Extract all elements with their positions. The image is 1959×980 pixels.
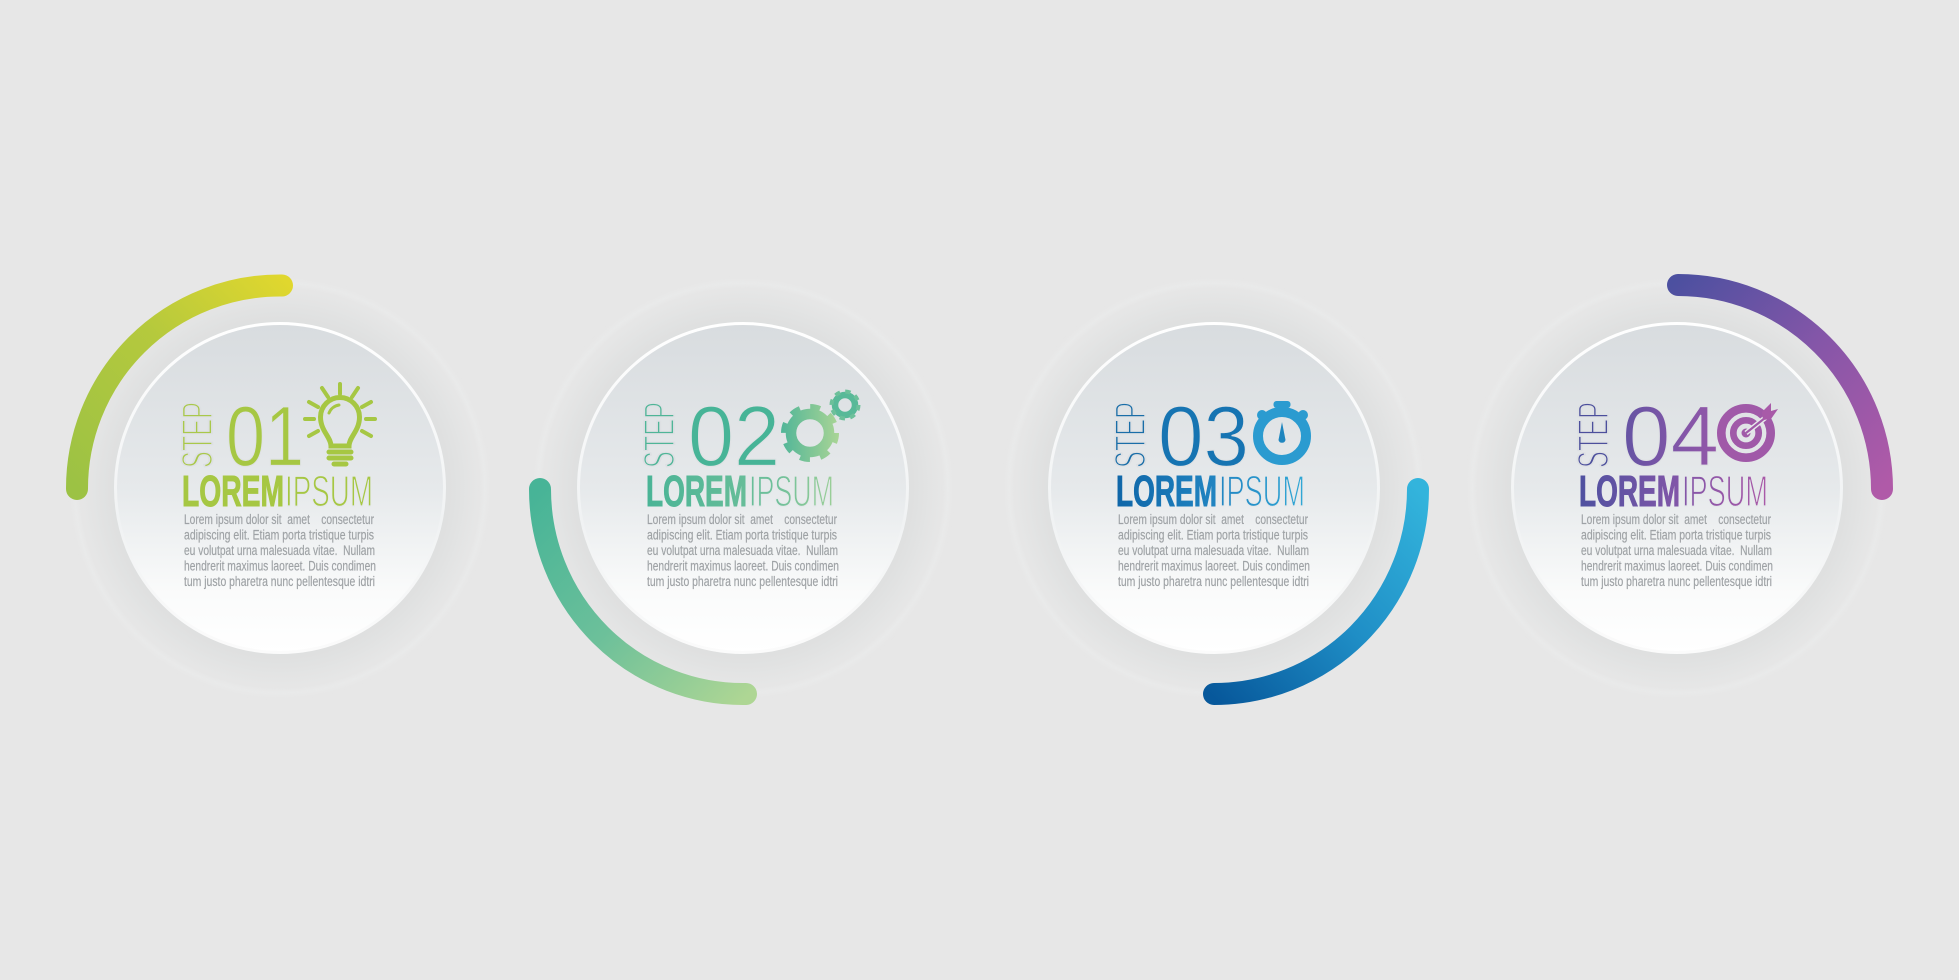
panel: step 1: [65, 273, 495, 703]
body text: tum justo pharetra nunc pellentesque idtri: [1581, 574, 1772, 589]
arc step 4: [1678, 285, 1882, 489]
backing rings step 2: [528, 273, 958, 703]
backing rings step 1: [65, 273, 495, 703]
icon: gears: [784, 392, 858, 458]
body text: Lorem ipsum dolor sit amet consectetur: [184, 512, 374, 527]
panel: step 4: [1462, 273, 1892, 703]
heading: IPSUM: [749, 468, 834, 516]
icon: stopwatch: [1257, 401, 1308, 460]
body text: Lorem ipsum dolor sit amet consectetur: [1118, 512, 1308, 527]
body text: [1118, 512, 1310, 589]
label: STEP: STEP: [636, 402, 684, 468]
heading: IPSUM: [1219, 468, 1305, 516]
number 01: 01: [226, 390, 304, 484]
label: STEP: STEP: [1570, 402, 1618, 468]
body text: tum justo pharetra nunc pellentesque idtri: [647, 574, 838, 589]
body text: eu volutpat urna malesuada vitae. Nullam: [184, 543, 375, 558]
body text: tum justo pharetra nunc pellentesque idtri: [184, 574, 375, 589]
backing rings step 3: [999, 273, 1429, 703]
body text: adipiscing elit. Etiam porta tristique turpis: [1581, 528, 1771, 542]
panel: step 3: [999, 273, 1429, 703]
body text: Lorem ipsum dolor sit amet consectetur: [647, 512, 837, 527]
number 04: 04: [1622, 390, 1719, 484]
arc step 2: [540, 489, 746, 694]
body text: [647, 512, 839, 589]
heading: IPSUM: [285, 468, 373, 516]
disc step 2: [578, 324, 908, 652]
disc step 3: [1050, 324, 1378, 652]
heading: LOREM: [1579, 468, 1680, 516]
body text: hendrerit maximus laoreet. Duis condimen: [647, 558, 839, 574]
body text: adipiscing elit. Etiam porta tristique turpis: [1118, 528, 1308, 542]
body text: eu volutpat urna malesuada vitae. Nullam: [647, 543, 838, 558]
body text: adipiscing elit. Etiam porta tristique turpis: [184, 528, 374, 542]
body text: Lorem ipsum dolor sit amet consectetur: [1581, 512, 1771, 527]
heading: IPSUM: [1682, 468, 1768, 516]
body text: eu volutpat urna malesuada vitae. Nullam: [1118, 543, 1309, 558]
icon: target: [1721, 403, 1778, 458]
label: STEP: STEP: [174, 402, 222, 468]
body text: eu volutpat urna malesuada vitae. Nullam: [1581, 543, 1772, 558]
heading: LOREM: [182, 468, 284, 516]
icon: light bulb: [305, 384, 375, 464]
body text: hendrerit maximus laoreet. Duis condimen: [1118, 558, 1310, 574]
body text: hendrerit maximus laoreet. Duis condimen: [184, 558, 376, 574]
backing rings step 4: [1462, 273, 1892, 703]
panel: step 2: [528, 273, 958, 703]
disc step 4: [1512, 324, 1842, 652]
arc step 1: [77, 285, 282, 489]
number 03: 03: [1158, 390, 1249, 484]
body text: hendrerit maximus laoreet. Duis condimen: [1581, 558, 1773, 574]
body text: tum justo pharetra nunc pellentesque idtri: [1118, 574, 1309, 589]
body text: adipiscing elit. Etiam porta tristique turpis: [647, 528, 837, 542]
body text: [1581, 512, 1773, 589]
heading: LOREM: [646, 468, 747, 516]
disc step 1: [116, 324, 444, 652]
heading: LOREM: [1116, 468, 1217, 516]
arc step 3: [1214, 489, 1418, 694]
body text: [184, 512, 376, 589]
number 02: 02: [688, 390, 780, 484]
label: STEP: STEP: [1107, 402, 1155, 468]
